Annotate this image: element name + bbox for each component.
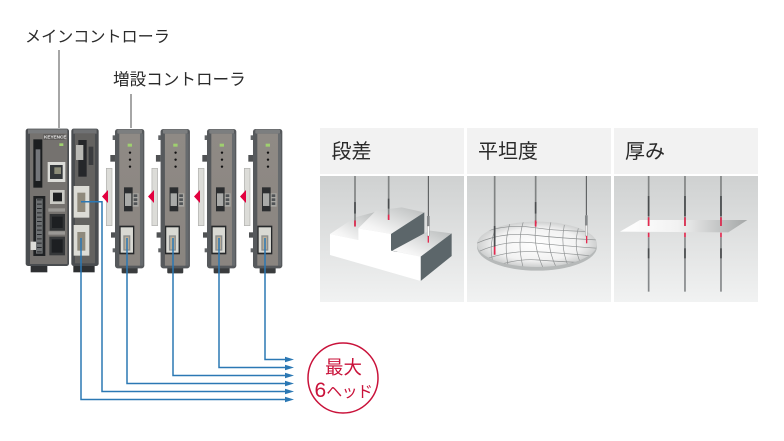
panel: flatness (467, 128, 611, 302)
callout: up to 6 heads: 6ヘッド (314, 379, 372, 402)
stepped block (330, 207, 452, 281)
panel: thickness (614, 128, 758, 302)
label: main controller: メインコントローラ (25, 28, 170, 46)
main controller device (26, 129, 69, 272)
disc with measurement mesh (475, 222, 598, 271)
label: expansion controller: 増設コントローラ (113, 70, 246, 89)
heading: thickness: 厚み (625, 141, 665, 163)
expansion controller 2 (152, 129, 190, 273)
heading: step height: 段差 (332, 140, 372, 163)
panel: step height (320, 128, 464, 302)
leader line: expansion controller (130, 94, 132, 128)
sensor probes (494, 176, 588, 255)
callout: up to 6 heads: 最大 (325, 357, 362, 378)
sensor probes (354, 176, 430, 243)
plate and opposing probes (620, 176, 747, 292)
leader line: main controller (58, 50, 60, 128)
callout: up to 6 heads (308, 343, 378, 413)
blue cables to heads (81, 202, 287, 400)
brand name: KEYENCE (44, 135, 67, 140)
red connection arrows between controllers (102, 190, 246, 203)
second unit attached to main controller (71, 129, 99, 272)
expansion controller 1 (106, 129, 144, 273)
expansion controller 3 (198, 129, 236, 273)
arrowheads (285, 357, 294, 402)
expansion controller 4 (244, 129, 282, 273)
heading: flatness: 平坦度 (478, 140, 538, 163)
